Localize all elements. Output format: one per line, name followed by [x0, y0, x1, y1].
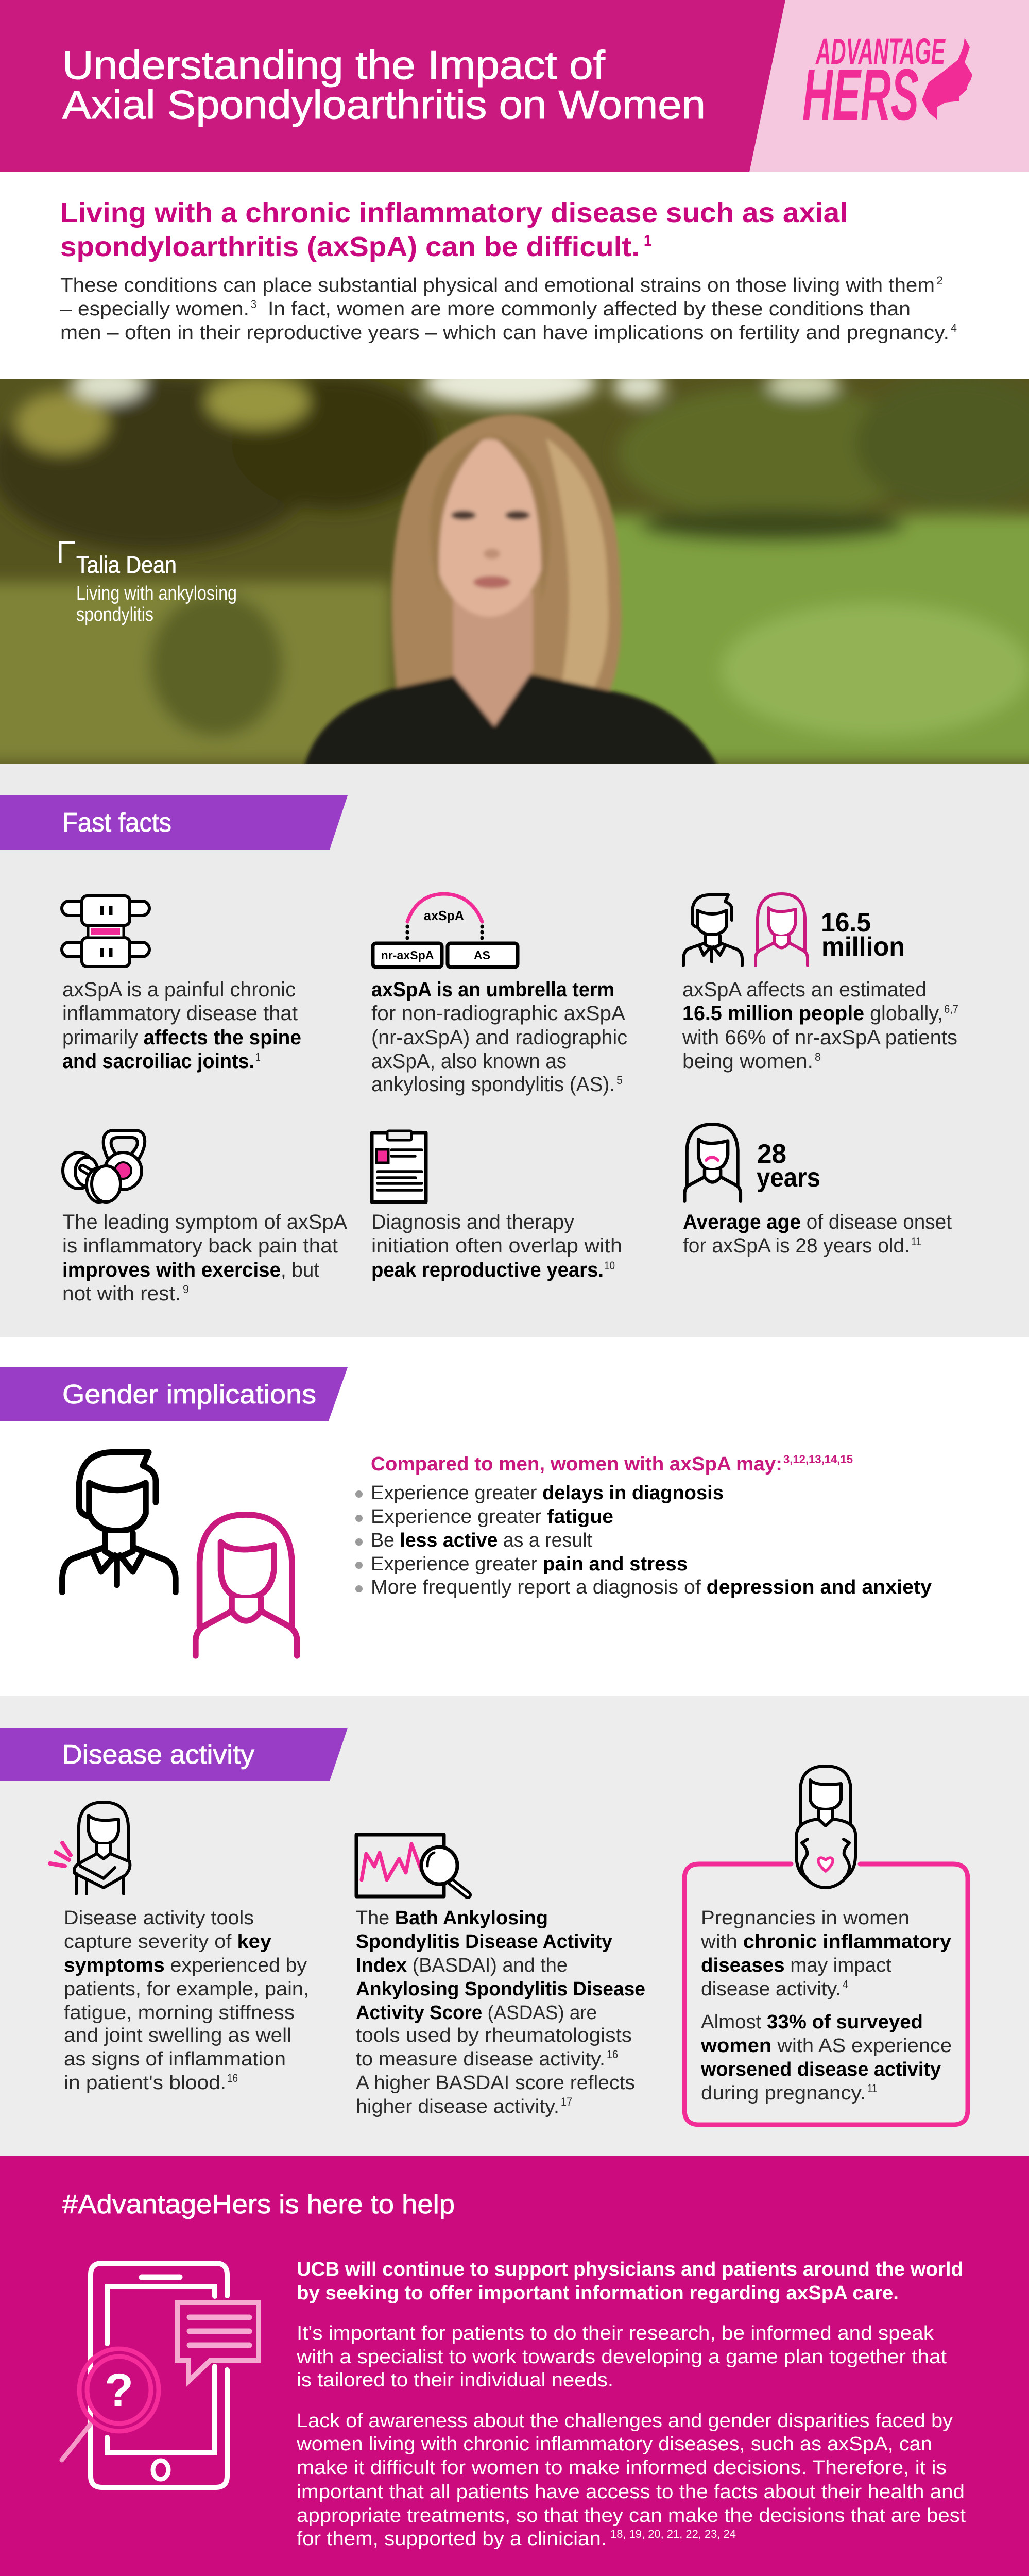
text: BASDAI and ASDAS: Spondylitis Disease Activity — [356, 1931, 612, 1953]
text: key symptoms: in patient's blood. — [64, 2072, 226, 2094]
callout: pregnancy — [684, 1766, 968, 2125]
fact: 16.5 million — [682, 894, 958, 1073]
caption: Talia Dean — [60, 543, 237, 625]
text: lack of awareness: for them, supported by a clinician. — [297, 2528, 607, 2550]
text: lack of awareness: important that all patients have access to the facts about their health and — [297, 2481, 965, 2503]
intro text: 3 — [251, 298, 256, 311]
text: spine: axSpA is a painful chronic — [62, 978, 296, 1001]
text: exercise — [62, 1211, 347, 1305]
text: patient research: with a specialist to work towards developing a game plan together that — [296, 2346, 947, 2368]
icon: pregnant woman — [796, 1766, 855, 1888]
icon: chart and magnifier — [356, 1835, 468, 1896]
caption: Talia Dean: spondylitis — [76, 604, 153, 625]
text: UCB commitment — [297, 2259, 963, 2304]
text: patient research — [296, 2323, 947, 2391]
icon: kettlebell and dumbbell — [63, 1130, 145, 1202]
icon: umbrella diagram: axSpA — [424, 908, 464, 923]
bullet list: Experience greater fatigue — [371, 1506, 613, 1528]
text: exercise: is inflammatory back pain that — [62, 1234, 338, 1257]
caption: Talia Dean: Talia Dean — [76, 551, 177, 578]
text: lack of awareness: 18, 19, 20, 21, 22, 23, 24 — [610, 2528, 736, 2540]
text: umbrella term: ankylosing spondylitis (AS). — [371, 1073, 615, 1096]
icon: umbrella diagram — [373, 894, 518, 967]
icon: spine — [62, 896, 149, 967]
text: lack of awareness — [296, 2410, 966, 2550]
heading: gender implications — [0, 1367, 348, 1421]
text: 16.5 million: 16.5 million people globally, — [682, 1002, 943, 1025]
intro heading: 1 — [644, 232, 651, 249]
text: 16.5 million: being women. — [682, 1050, 813, 1073]
heading: fast facts: Fast facts — [62, 808, 172, 838]
stat: 28 years: 28 — [757, 1139, 786, 1169]
icon: man large — [62, 1452, 176, 1592]
bullet list: Experience greater delays in diagnosis — [371, 1482, 724, 1504]
caption: Talia Dean: Living with ankylosing — [76, 583, 237, 604]
callout text — [700, 1907, 952, 2104]
text: patient research: is tailored to their individual needs. — [297, 2369, 613, 2391]
title — [62, 42, 706, 127]
text: key symptoms: capture severity of key — [64, 1931, 271, 1953]
panel: fast facts — [0, 764, 1029, 1337]
text: BASDAI and ASDAS: Ankylosing Spondylitis Disease — [356, 1978, 645, 2000]
text: key symptoms: Disease activity tools — [64, 1907, 254, 1929]
comparison heading: Compared to men, women with axSpA may: — [371, 1453, 782, 1475]
text: BASDAI and ASDAS: tools used by rheumatologists — [356, 2025, 632, 2046]
intro text: 2 — [936, 274, 943, 287]
column: key symptoms — [50, 1802, 309, 2094]
logo: Advantage Hers: HERS — [802, 54, 919, 135]
text: 28 years — [683, 1211, 952, 1257]
text: lack of awareness: make it difficult for women to make informed decisions. Therefore, it is — [297, 2457, 947, 2479]
heading: fast facts — [0, 795, 348, 850]
text: BASDAI and ASDAS: higher disease activity. — [356, 2096, 559, 2117]
stat: 28 years: years — [757, 1163, 820, 1193]
text: key symptoms: symptoms experienced by — [64, 1955, 307, 1976]
text: lack of awareness: Lack of awareness about the challenges and gender disparities faced by — [297, 2410, 953, 2432]
text: BASDAI and ASDAS: 16 — [607, 2048, 618, 2061]
stat: 16.5 million — [821, 908, 905, 962]
text: 16.5 million: axSpA affects an estimated — [682, 978, 927, 1001]
photo: Talia Dean — [0, 360, 1029, 768]
intro text — [60, 274, 957, 344]
text: key symptoms: as signs of inflammation — [64, 2048, 286, 2070]
stat: 28 years — [757, 1139, 820, 1193]
intro text: 4 — [951, 321, 957, 334]
fact: spine — [62, 896, 301, 1073]
callout border — [684, 1864, 968, 2125]
heading: gender implications: Gender implications — [62, 1380, 316, 1410]
callout text: Almost 33% of surveyed — [701, 2011, 923, 2033]
fact: 28 years — [683, 1124, 952, 1257]
text: patient research: It's important for patients to do their research, be informed and speak — [297, 2323, 934, 2344]
callout text: diseases may impact — [701, 1955, 891, 1976]
stat: 16.5 million: million — [821, 932, 905, 962]
intro text: In fact, women are more commonly affected by these conditions than — [268, 298, 911, 320]
text: spine: primarily affects the spine — [62, 1026, 301, 1049]
text: reproductive years: 10 — [604, 1259, 615, 1272]
text: exercise: The leading symptom of axSpA — [62, 1211, 347, 1233]
callout text: Pregnancies in women — [701, 1907, 910, 1929]
callout text: during pregnancy. — [701, 2082, 866, 2104]
text: spine: 1 — [255, 1050, 261, 1063]
text: 16.5 million: with 66% of nr-axSpA patients — [682, 1026, 957, 1049]
callout text: 11 — [867, 2082, 877, 2095]
callout text: disease activity. — [701, 1978, 841, 2000]
intro text: – especially women. — [60, 298, 249, 320]
title: Axial Spondyloarthritis on Women — [62, 82, 706, 127]
text: key symptoms — [64, 1907, 309, 2094]
callout text: with chronic inflammatory — [700, 1931, 951, 1953]
bullet list: Experience greater pain and stress — [371, 1553, 688, 1575]
bullet list: Be less active as a result — [371, 1530, 592, 1551]
header band — [0, 0, 1029, 172]
text: BASDAI and ASDAS: Index (BASDAI) and the — [356, 1955, 568, 1976]
title: Understanding the Impact of — [62, 42, 605, 88]
panel: disease activity — [0, 1696, 1029, 2156]
text: UCB commitment: by seeking to offer important information regarding axSpA care. — [297, 2282, 899, 2304]
text: BASDAI and ASDAS: to measure disease activity. — [356, 2048, 605, 2070]
text: BASDAI and ASDAS — [356, 1907, 645, 2117]
intro heading — [60, 197, 848, 262]
comparison heading: 3,12,13,14,15 — [783, 1453, 853, 1466]
text: key symptoms: patients, for example, pain, — [64, 1978, 309, 2000]
icon: man — [683, 895, 742, 965]
stat: 16.5 million: 16.5 — [821, 908, 871, 938]
callout text: 4 — [843, 1978, 848, 1991]
panel: AdvantageHers help — [0, 2156, 1029, 2576]
text: umbrella term: 5 — [616, 1074, 623, 1087]
text: 16.5 million — [682, 978, 958, 1073]
logo panel — [749, 0, 1029, 172]
text: 16.5 million: 6,7 — [944, 1003, 958, 1015]
callout text: worsened disease activity — [700, 2059, 941, 2080]
text: reproductive years: Diagnosis and therapy — [371, 1211, 574, 1233]
column: BASDAI and ASDAS — [356, 1835, 645, 2117]
fact: exercise — [62, 1130, 347, 1305]
heading: here to help: #AdvantageHers is here to help — [62, 2190, 455, 2219]
intro heading: spondyloarthritis (axSpA) can be difficult. — [60, 231, 640, 262]
text: key symptoms: and joint swelling as well — [64, 2025, 291, 2046]
text: reproductive years — [371, 1211, 622, 1281]
text: lack of awareness: appropriate treatments, so that they can make the decisions that are best — [297, 2505, 966, 2527]
icon: phone with magnifier and chat: ? — [105, 2364, 133, 2417]
text: exercise: not with rest. — [62, 1282, 181, 1305]
fact: reproductive years — [371, 1131, 622, 1281]
text: umbrella term: for non-radiographic axSpA — [371, 1002, 625, 1025]
heading: disease activity — [0, 1728, 348, 1781]
icon: umbrella diagram: nr-axSpA — [381, 948, 434, 962]
icon: woman large — [196, 1515, 297, 1656]
text: reproductive years: peak reproductive years. — [371, 1259, 604, 1281]
text: lack of awareness: women living with chronic inflammatory diseases, such as axSpA, can — [296, 2433, 932, 2455]
text: BASDAI and ASDAS: The Bath Ankylosing — [356, 1907, 548, 1929]
text: key symptoms: fatigue, morning stiffness — [64, 2002, 295, 2024]
text: 28 years: Average age of disease onset — [683, 1211, 952, 1233]
logo: Advantage Hers — [802, 31, 972, 135]
text: umbrella term: axSpA is an umbrella term — [371, 978, 614, 1001]
icon: woman with pain — [50, 1802, 130, 1894]
text: umbrella term — [371, 978, 627, 1096]
heading: disease activity: Disease activity — [62, 1740, 254, 1770]
intro text: These conditions can place substantial physical and emotional strains on those living with them — [60, 275, 935, 296]
icon: phone with magnifier and chat — [62, 2263, 259, 2487]
text: 16.5 million: 8 — [815, 1050, 821, 1063]
intro heading: Living with a chronic inflammatory disease such as axial — [60, 197, 848, 228]
callout text: women with AS experience — [700, 2035, 952, 2057]
text: BASDAI and ASDAS: 17 — [561, 2095, 572, 2108]
text: key symptoms: 16 — [227, 2072, 238, 2084]
text: BASDAI and ASDAS: A higher BASDAI score reflects — [356, 2072, 635, 2094]
text: umbrella term: (nr-axSpA) and radiographic — [371, 1026, 627, 1049]
panel: gender implications — [0, 1367, 932, 1656]
text: 28 years: 11 — [911, 1235, 921, 1248]
intro text: men – often in their reproductive years – which can have implications on fertility and pregnancy. — [60, 322, 949, 344]
text: spine: inflammatory disease that — [62, 1002, 298, 1025]
icon: clipboard — [372, 1131, 426, 1202]
icon: umbrella diagram: AS — [474, 948, 490, 962]
text: umbrella term: axSpA, also known as — [371, 1050, 567, 1073]
text: spine — [62, 978, 301, 1073]
icon: woman with frown — [684, 1124, 741, 1201]
text: exercise: 9 — [183, 1283, 189, 1296]
bullet list — [355, 1482, 932, 1598]
icon: woman pink — [756, 894, 808, 965]
bullet list: More frequently report a diagnosis of depression and anxiety — [371, 1577, 932, 1598]
text: reproductive years: initiation often overlap with — [371, 1234, 622, 1257]
fact: umbrella term — [371, 894, 627, 1096]
text: BASDAI and ASDAS: Activity Score (ASDAS) are — [356, 2002, 597, 2024]
text: exercise: improves with exercise, but — [62, 1259, 319, 1281]
text: spine: and sacroiliac joints. — [62, 1050, 254, 1073]
text: 28 years: for axSpA is 28 years old. — [683, 1234, 910, 1257]
text: UCB commitment: UCB will continue to support physicians and patients around the world — [297, 2259, 963, 2280]
